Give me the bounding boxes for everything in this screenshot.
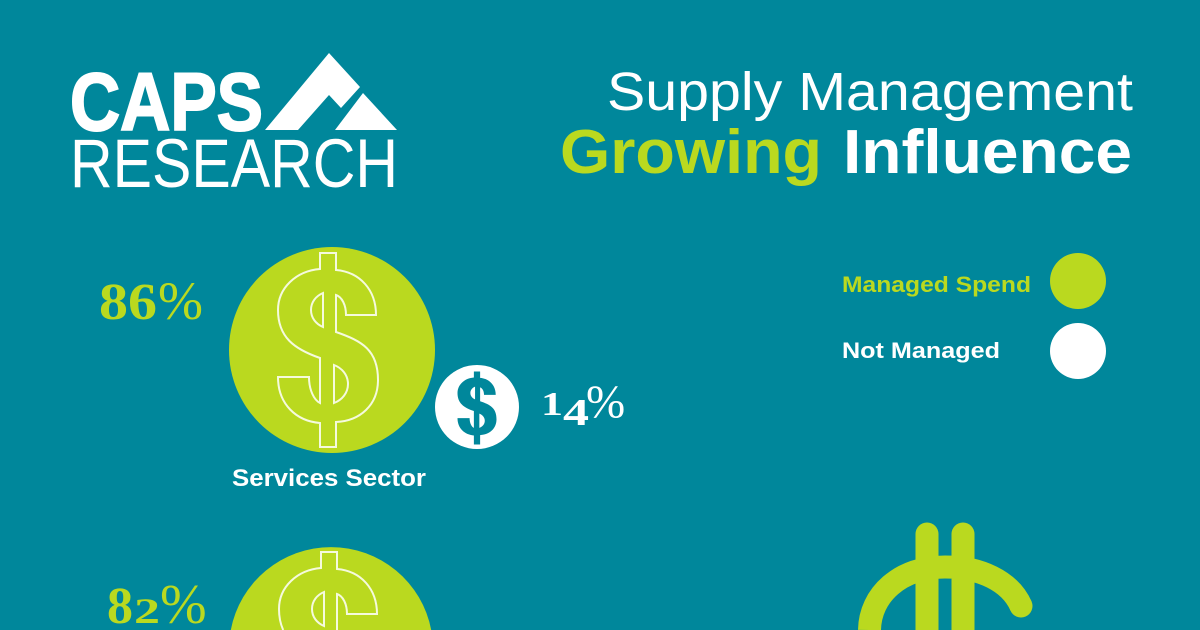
legend item: managed spend [842, 253, 1106, 309]
legend item: not managed [842, 323, 1106, 379]
logo: CAPS Research [70, 53, 398, 202]
panel: services sector [99, 247, 625, 492]
logo wordmark: RESEARCH: RESEARCH [70, 125, 398, 202]
logo wordmark: CAPS: CAPS [70, 57, 263, 148]
panel: second sector (cropped) [107, 547, 431, 630]
legend [842, 253, 1106, 379]
icon: large managed spend dollar coin [229, 247, 435, 453]
label: 14% not managed: 1 [541, 386, 563, 423]
title line: Growing Influence: Growing [560, 118, 822, 187]
title [560, 62, 1133, 187]
label: 86% managed: % [158, 271, 203, 331]
title line: Growing Influence: Influence [843, 118, 1132, 187]
icon: managed spend dollar coin, cropped [231, 547, 431, 630]
title line: Supply Management: Supply Management [607, 62, 1133, 122]
label: 14% not managed: % [586, 376, 625, 428]
label: 14% not managed: 4 [563, 392, 589, 434]
icon: small not-managed dollar coin [435, 365, 519, 449]
icon: large decorative dollar, cropped [870, 522, 1032, 630]
label: Services Sector: Services Sector [232, 465, 426, 492]
legend item: managed spend: Managed Spend [842, 272, 1031, 297]
label: 86% managed: 86 [99, 274, 157, 331]
icon: mountain peaks [265, 53, 397, 130]
label: 82% managed: 2 [134, 591, 160, 630]
legend item: not managed: Not Managed [842, 338, 1000, 363]
